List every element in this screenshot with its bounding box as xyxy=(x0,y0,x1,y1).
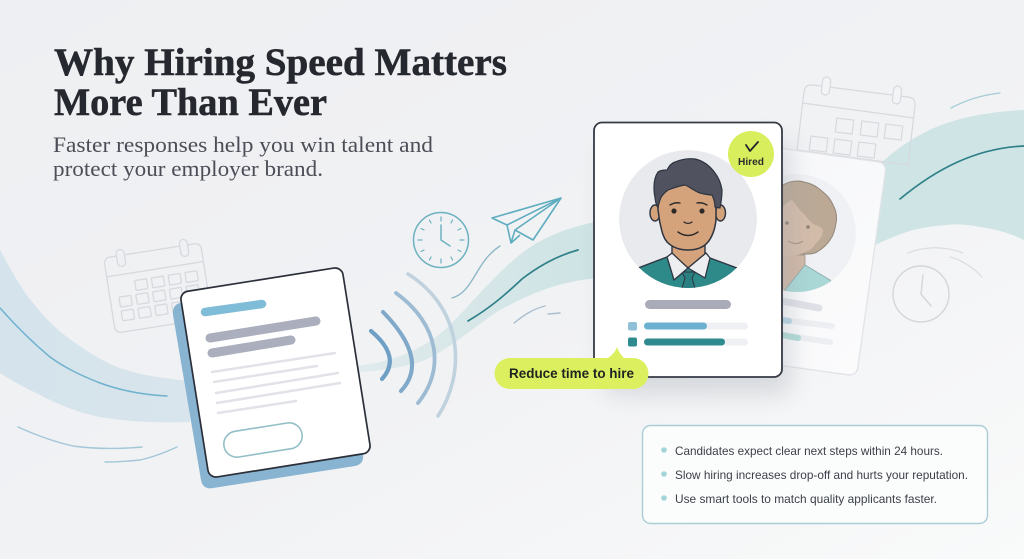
panel: key points xyxy=(642,426,988,524)
clock motion wisps xyxy=(908,248,982,277)
document grey bars xyxy=(210,321,316,353)
name bar xyxy=(645,300,731,309)
back card sheet xyxy=(670,137,887,376)
main card sheet xyxy=(594,122,782,377)
right dark teal line xyxy=(900,146,1024,199)
hired badge xyxy=(728,131,774,177)
panel: main candidate card xyxy=(594,122,782,377)
document heading bar xyxy=(205,304,262,312)
panel: back candidate card xyxy=(782,148,886,376)
avatar: man xyxy=(619,150,757,300)
icon: right grey clock xyxy=(893,266,949,322)
icon: teal clock xyxy=(414,212,468,268)
skill row 2 xyxy=(628,338,748,346)
document text lines xyxy=(212,353,340,413)
middle dark teal line xyxy=(468,250,578,321)
bullet 2: Slow hiring increases drop-off and hurts your reputation. xyxy=(675,468,968,482)
bullet 3: Use smart tools to match quality applicants faster. xyxy=(675,492,937,506)
subtitle: protect your employer brand. xyxy=(53,156,323,181)
callout: reduce time to hire xyxy=(494,347,648,389)
skill row 1 xyxy=(628,322,748,330)
back avatar xyxy=(782,180,856,292)
lower middle wisps xyxy=(514,306,560,323)
callout: reduce time to hire: Reduce time to hire xyxy=(509,366,634,381)
lower left wisps xyxy=(18,427,177,462)
title: Why Hiring Speed Matters xyxy=(54,41,507,84)
subtitle: Faster responses help you win talent and xyxy=(53,132,433,157)
bullet 1: Candidates expect clear next steps within 24 hours. xyxy=(675,444,943,458)
main card shadow xyxy=(604,140,792,395)
upward wisp xyxy=(452,246,500,298)
title xyxy=(54,41,507,124)
document shadow layer xyxy=(173,285,363,488)
icon: signal waves xyxy=(371,274,456,416)
left wave band xyxy=(0,250,190,422)
left blue line xyxy=(0,308,167,396)
icon: paper plane xyxy=(492,198,561,243)
right wave band xyxy=(875,110,1024,245)
top right wisp xyxy=(951,93,1000,108)
subtitle xyxy=(53,132,433,181)
document sheet xyxy=(180,267,371,478)
document button xyxy=(222,421,304,459)
middle wave band xyxy=(358,221,600,372)
title: More Than Ever xyxy=(54,81,327,124)
panel: application document xyxy=(180,267,371,478)
hired badge: Hired xyxy=(738,156,764,168)
back card bars xyxy=(782,301,819,308)
icon: right calendar xyxy=(797,77,915,165)
icon: left calendar xyxy=(103,237,212,333)
